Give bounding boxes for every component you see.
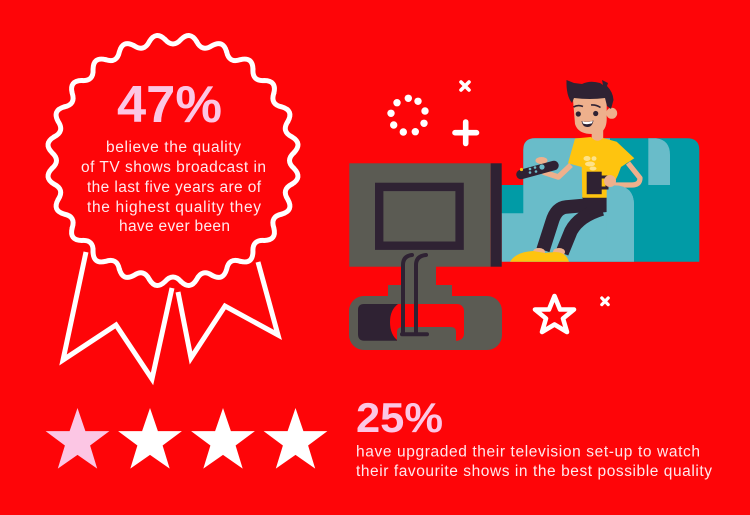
badge description: believe the quality <box>106 139 241 156</box>
badge description: have ever been <box>119 218 230 235</box>
left arm <box>543 165 571 177</box>
tv body <box>349 163 491 267</box>
smile <box>582 120 594 127</box>
light cushion <box>648 138 670 185</box>
star rating <box>46 408 327 469</box>
right arm <box>612 163 640 185</box>
scalloped seal outline <box>46 34 300 287</box>
ribbon tails <box>63 252 278 379</box>
stat: 25%: 25% <box>356 394 443 441</box>
feet <box>533 248 545 256</box>
mug and steam <box>584 156 607 194</box>
star 4 <box>264 408 327 469</box>
shirt <box>568 137 634 198</box>
cross mark top <box>461 82 469 90</box>
hair <box>566 80 614 109</box>
neck <box>592 126 603 143</box>
dark teal gap behind arm <box>612 162 640 185</box>
stat: 47%: 47% <box>117 76 222 134</box>
decorative sparkles <box>387 82 608 332</box>
badge description: the last five years are of <box>87 179 262 196</box>
star 1 highlighted <box>46 408 109 469</box>
remote <box>520 164 554 174</box>
star 3 <box>191 408 255 469</box>
upgrade description: their favourite shows in the best possible quality <box>356 463 712 480</box>
tv panel frame <box>379 187 460 246</box>
left arm back <box>502 185 524 214</box>
cross mark lower <box>602 298 608 305</box>
star 2 <box>118 408 182 469</box>
slippers <box>510 251 569 262</box>
base inner tab <box>397 327 456 342</box>
television <box>349 163 502 350</box>
sofa light seat and arm <box>502 138 634 262</box>
rosette badge <box>46 34 300 379</box>
legs <box>543 204 602 253</box>
hand holding remote <box>536 157 548 164</box>
badge description: the highest quality they <box>87 199 261 216</box>
tv front edge <box>491 163 502 267</box>
cable <box>402 255 427 334</box>
upgrade description: have upgraded their television set-up to watch <box>356 444 700 460</box>
hand on mug <box>604 175 616 187</box>
plus mark <box>455 122 476 144</box>
base <box>349 296 502 350</box>
dark base cutout <box>358 304 398 341</box>
red cutout <box>390 304 464 341</box>
neck and step <box>388 266 452 297</box>
dot ring <box>387 95 429 136</box>
ear <box>606 108 617 119</box>
face <box>573 96 607 134</box>
sofa arm overlap <box>607 185 634 240</box>
outlined star <box>535 296 574 332</box>
badge description: of TV shows broadcast in <box>81 159 266 176</box>
eyes and brows <box>574 105 600 117</box>
badge description <box>81 139 266 235</box>
sofa <box>502 138 699 262</box>
sofa dark back <box>523 138 699 262</box>
upgrade description <box>356 444 712 480</box>
man on sofa <box>510 80 640 262</box>
